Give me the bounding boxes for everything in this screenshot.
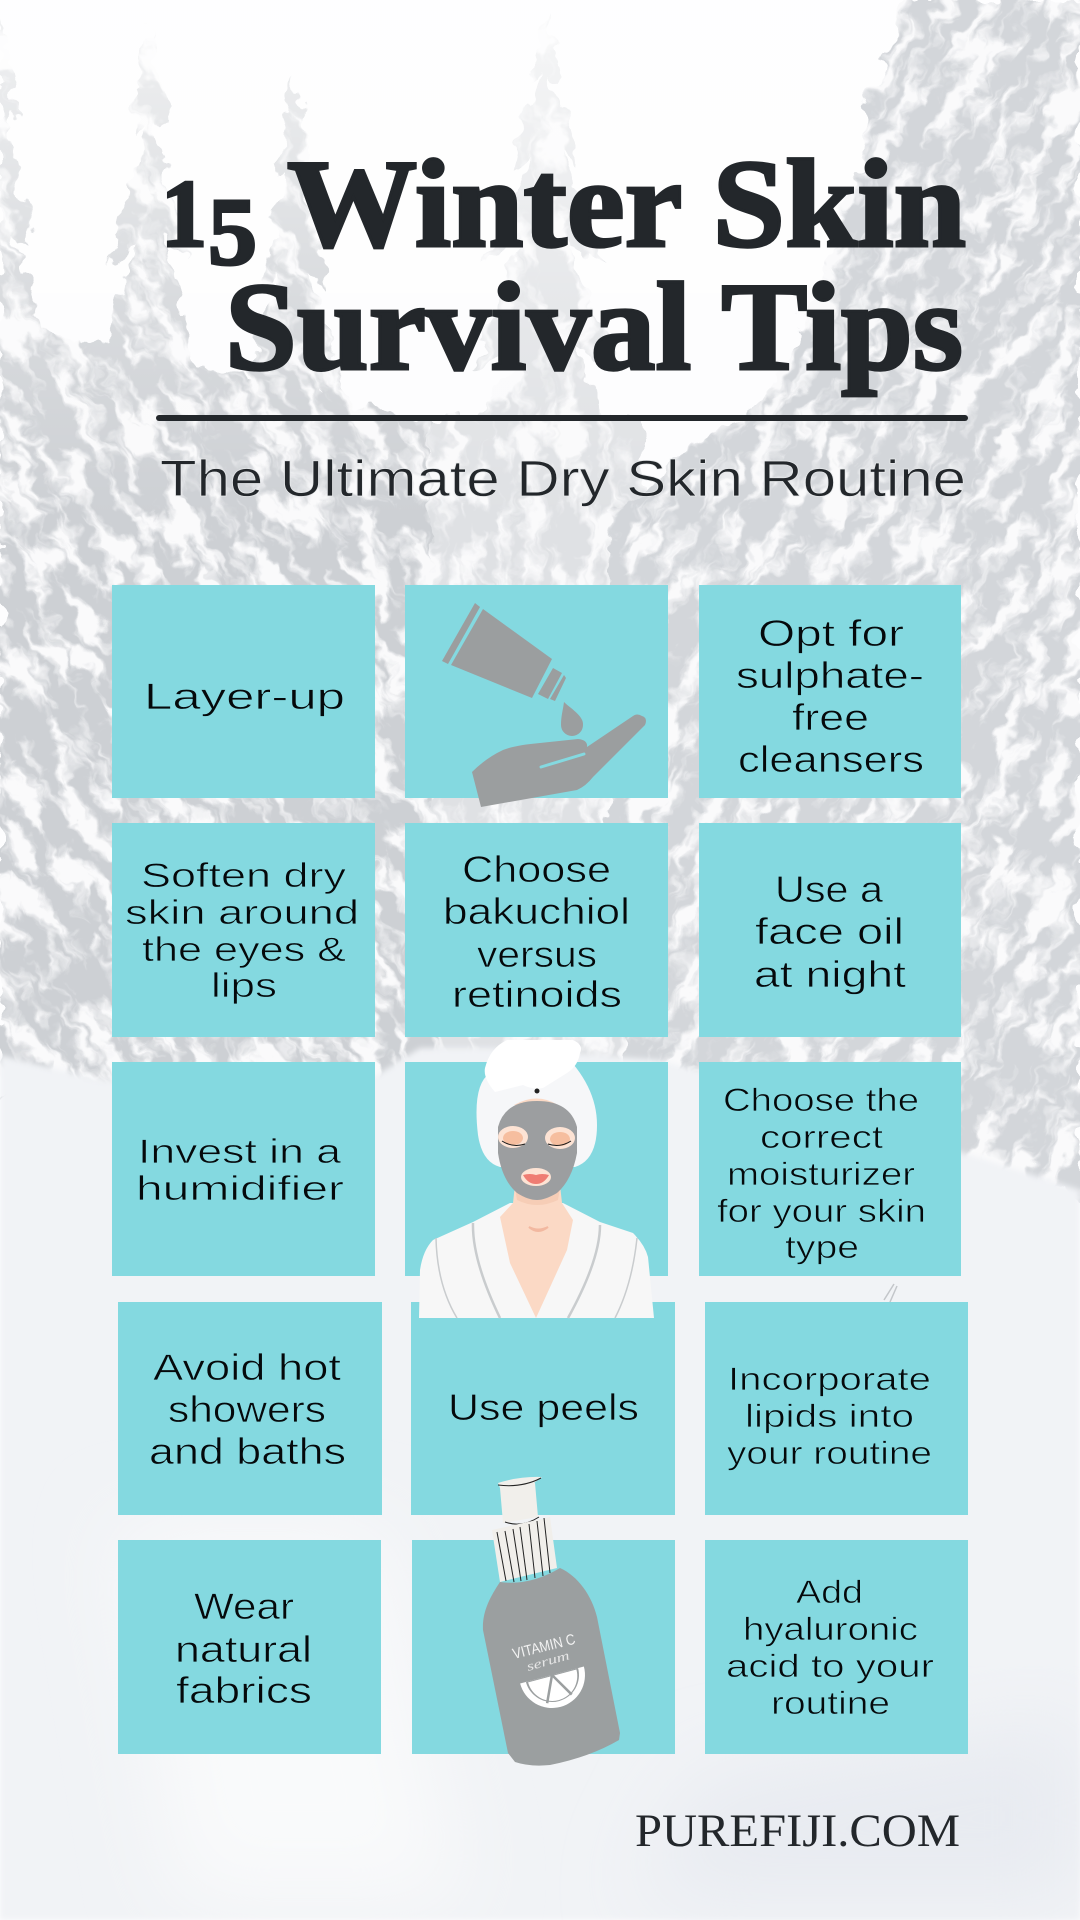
title: Survival Tips: [225, 258, 963, 397]
card: use peels: Use peels: [448, 1387, 639, 1428]
title: 5: [208, 178, 257, 285]
card: bakuchiol: retinoids: [452, 974, 622, 1015]
subtitle: The Ultimate Dry Skin Routine: [160, 450, 966, 507]
card: behind serum bottle: [412, 1540, 675, 1754]
card: Layer-up: Layer-up: [144, 676, 345, 717]
card: hyaluronic acid: hyaluronic: [743, 1611, 918, 1647]
card: hot showers: showers: [168, 1389, 326, 1430]
card: face oil: [699, 823, 961, 1037]
title: Winter Skin: [287, 135, 966, 274]
card: bakuchiol: versus: [477, 934, 597, 975]
card: tube and hand icon: [405, 585, 668, 807]
illustration: vitamin C serum bottle: [483, 1477, 620, 1766]
card: bakuchiol: [405, 823, 668, 1037]
card: humidifier: [112, 1062, 375, 1276]
card: hyaluronic acid: Add: [796, 1574, 863, 1610]
card: lipids: your routine: [727, 1435, 932, 1471]
illustration: vitamin C serum bottle: serum: [525, 1647, 571, 1674]
card: lipids: lipids into: [745, 1398, 914, 1434]
card: sulphate-free cleansers: Opt for: [758, 613, 904, 654]
card: hot showers: and baths: [149, 1431, 346, 1472]
card: bakuchiol: bakuchiol: [443, 891, 630, 932]
card: hot showers: Avoid hot: [153, 1347, 342, 1388]
card: hot showers: [118, 1302, 382, 1515]
card: sulphate-free cleansers: sulphate-: [736, 655, 924, 696]
card: face oil: at night: [754, 954, 907, 995]
card: natural fabrics: natural: [175, 1629, 312, 1670]
card: hyaluronic acid: acid to your: [726, 1648, 934, 1684]
card: moisturizer: for your skin: [717, 1193, 926, 1229]
card: moisturizer: Choose the: [723, 1082, 919, 1118]
illustration: woman with face mask and towel: [419, 1040, 654, 1318]
card: sulphate-free cleansers: cleansers: [738, 739, 924, 780]
card: soften dry skin: [112, 823, 375, 1037]
title: 1: [161, 160, 207, 267]
icon: lotion tube pouring onto hand: [442, 603, 646, 807]
card: humidifier: humidifier: [136, 1170, 344, 1208]
title rule: [156, 415, 968, 421]
illustration: vitamin C serum bottle: VITAMIN C: [511, 1631, 577, 1663]
card: soften dry skin: the eyes &: [142, 931, 346, 969]
card: humidifier: Invest in a: [138, 1133, 341, 1171]
card: soften dry skin: lips: [211, 967, 277, 1005]
card: moisturizer: correct: [760, 1119, 883, 1155]
card: soften dry skin: skin around: [125, 894, 359, 932]
card: natural fabrics: Wear: [194, 1586, 294, 1627]
card: bakuchiol: Choose: [462, 849, 611, 890]
card: lipids: [705, 1302, 968, 1515]
card: lipids: Incorporate: [728, 1361, 931, 1397]
title: [161, 135, 966, 397]
card: use peels: [411, 1302, 675, 1515]
card: natural fabrics: fabrics: [176, 1670, 312, 1711]
card: sulphate-free cleansers: [699, 585, 961, 798]
card: Layer-up: [112, 585, 375, 798]
card: behind mask illustration: [405, 1062, 668, 1276]
card: sulphate-free cleansers: free: [792, 697, 869, 738]
card: hyaluronic acid: routine: [771, 1685, 890, 1721]
brand footer: PUREFIJI.COM: [635, 1805, 960, 1857]
card: face oil: Use a: [775, 869, 883, 910]
card: moisturizer: type: [785, 1229, 859, 1265]
card: moisturizer: moisturizer: [727, 1156, 915, 1192]
card: moisturizer: [699, 1062, 961, 1276]
card: soften dry skin: Soften dry: [141, 857, 346, 895]
card: hyaluronic acid: [705, 1540, 968, 1754]
card: face oil: face oil: [755, 911, 904, 952]
card: natural fabrics: [118, 1540, 381, 1754]
